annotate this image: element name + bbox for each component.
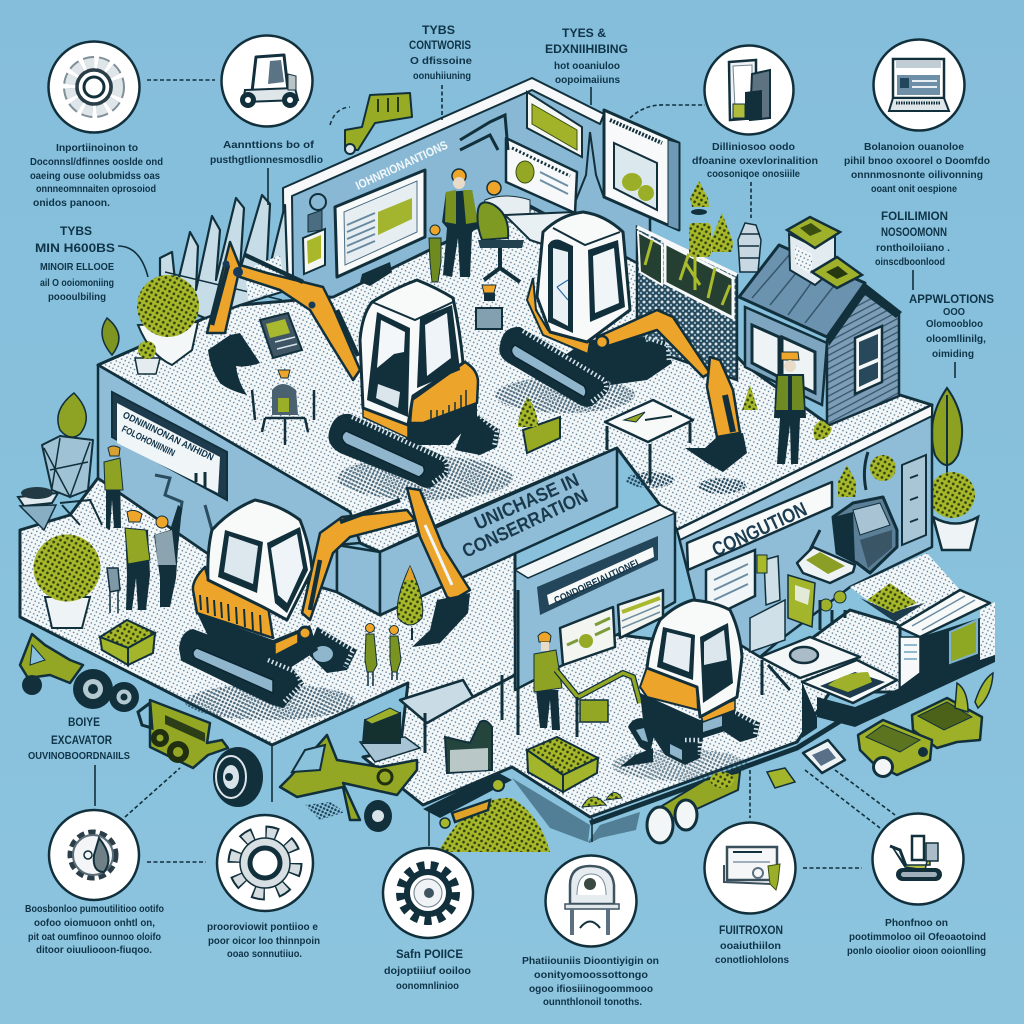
text: types of mini excavators — [35, 226, 115, 303]
tall wall tools — [902, 455, 926, 545]
green mound — [438, 798, 550, 852]
track panel — [342, 431, 424, 477]
text: vehicle note: Aannttions bo of — [223, 140, 315, 151]
clipboard and worker on floor — [252, 313, 314, 445]
cab shell — [537, 212, 630, 342]
icon: laptop — [874, 40, 964, 130]
bucket — [685, 433, 747, 472]
boom — [597, 310, 710, 377]
text: laptop note: onnnmosnonte oilivonning — [851, 170, 983, 181]
text: foundation note — [875, 211, 950, 268]
excavator one — [207, 242, 500, 488]
rear track — [455, 410, 500, 455]
text: top left note: onidos panoon. — [33, 198, 110, 209]
desk and chair lower — [360, 675, 515, 773]
rear track — [610, 340, 672, 385]
rear panel — [703, 716, 722, 732]
icon: gear with drop — [49, 810, 139, 900]
text: function note: ooaiuthiilon — [720, 941, 781, 952]
text: laptop note: pihil bnoo oxoorel o Doomfdo — [844, 156, 990, 167]
lower right wall — [677, 405, 932, 657]
text: applications note: oloomllinilg, — [926, 334, 986, 345]
text: laptop note: ooant onit oespione — [871, 184, 957, 195]
text: types and engineering: oopoimaiiuns — [555, 75, 620, 86]
front track treads — [685, 740, 700, 755]
text: safe police note — [384, 949, 471, 992]
framed green picture — [527, 92, 582, 157]
text: types of mini excavators: poooulbiling — [48, 292, 106, 303]
text: types of mini excavators: MIN H600BS — [35, 243, 115, 255]
text: applications note: OOO — [943, 307, 965, 318]
text: types of mini excavators: ail O ooiomoniing — [40, 278, 114, 289]
left small plants — [102, 318, 160, 374]
conifers and urn — [689, 181, 761, 272]
text: door machine note — [692, 142, 818, 180]
cab windows — [367, 305, 460, 417]
text: types of controls: oonuhiiuning — [413, 71, 471, 82]
text: laptop note — [844, 142, 990, 195]
upper floor platform — [98, 205, 932, 552]
text: arch machine note: Phatiiouniis Dioontiyigin on — [522, 956, 659, 967]
excavator four — [620, 600, 760, 767]
orange lower plate — [275, 633, 298, 655]
text: top left note: Inportiinoinon to — [56, 143, 138, 154]
shaded floor patches — [185, 377, 748, 781]
text: function note — [715, 925, 789, 966]
green carts right — [858, 673, 993, 776]
text: laptop note: Bolanoion ouanoloe — [864, 142, 964, 153]
stick cylinder — [725, 395, 733, 432]
hydraulic line — [310, 500, 400, 610]
wall banner: ODNININONAN ANHIDN — [121, 410, 216, 464]
text: gear drop note: oofoo oiomuoon onhtl on, — [34, 918, 155, 929]
glass stand with leaf plant — [18, 393, 102, 530]
dark chassis — [565, 337, 650, 382]
text: large gear note: poor oicor loo thinnpoin — [208, 936, 320, 947]
right window — [855, 326, 882, 394]
seated worker center — [476, 285, 502, 329]
body vents — [431, 390, 466, 424]
green crate on lower floor — [100, 620, 155, 665]
text: excavator components — [28, 717, 130, 762]
text: types of controls: O dfissoine — [410, 56, 472, 67]
lower floor platform — [20, 478, 900, 843]
roof lines — [752, 254, 840, 323]
text: top left note: Doconnsl/dfinnes ooslde ond — [30, 157, 163, 168]
icon: door and machine — [704, 46, 794, 134]
kiosk machine — [833, 497, 897, 573]
roof edge — [372, 302, 453, 320]
tray on wall — [797, 530, 855, 583]
boom — [240, 265, 360, 380]
panel banner — [537, 536, 658, 615]
front track — [328, 414, 449, 488]
chassis — [640, 693, 735, 765]
middle window — [782, 337, 815, 393]
icon: mini excavator — [872, 814, 964, 904]
house — [739, 217, 902, 426]
large monitor — [335, 170, 425, 286]
text: gear drop note — [25, 904, 164, 956]
bucket — [412, 593, 470, 647]
boom pivot — [596, 336, 608, 348]
rear track — [722, 705, 760, 742]
wall poster screen — [706, 550, 755, 620]
track panel — [193, 648, 273, 693]
text: excavator components: OUVINOBOORDNAIILS — [28, 751, 130, 762]
seated worker and chair — [478, 181, 530, 282]
text: arch machine note: ogoo ifiosiiinogoommooo — [529, 984, 653, 995]
conservation wall: UNICHASE IN — [471, 470, 582, 535]
text: vehicle note — [210, 140, 323, 166]
consultation banner: CONGUTION — [709, 498, 811, 562]
text: gear drop note: pit oat oumfinoo ounnoo oloifo — [28, 932, 161, 943]
track treads — [523, 331, 606, 403]
icon: gear flower — [48, 42, 140, 132]
text: door machine note: Dilliniosoo oodo — [712, 142, 795, 153]
text: arch machine note — [522, 956, 659, 1008]
worker by house — [742, 352, 832, 464]
green poster — [303, 229, 325, 274]
orange plate — [700, 700, 735, 722]
tall tree and pot right — [929, 388, 978, 550]
text: excavator components: EXCAVATOR — [51, 735, 113, 747]
left wall — [98, 365, 360, 592]
front track — [499, 327, 609, 407]
boom — [302, 510, 415, 620]
text: safe police note: Safn POIICE — [396, 949, 463, 961]
text: arch machine note: ounnthlonoil tonoths. — [543, 997, 642, 1008]
text: large gear note: ooao sonnutiiuo. — [227, 949, 302, 960]
pivot ring — [299, 627, 311, 639]
icon: black gear — [383, 848, 473, 938]
text: applications note — [909, 294, 994, 360]
shop building — [855, 590, 995, 727]
text: foundation note: oinscdboonlood — [875, 257, 945, 268]
panel banner: CONDOIBEIAUTIONEI — [553, 558, 641, 607]
workers lower left — [104, 446, 401, 686]
text: foundation note: NOSOOMONN — [881, 227, 947, 239]
lower center panel — [515, 505, 675, 735]
worker two — [154, 505, 182, 607]
text: types and engineering — [545, 28, 628, 86]
left window — [752, 325, 779, 377]
top forklift attachment — [330, 93, 412, 154]
wall banner — [112, 392, 227, 500]
text: applications note: oimiding — [932, 349, 974, 360]
green machine bottom left — [20, 634, 139, 712]
text: gear drop note: ditoor oiuuliooon-fiuqoo. — [36, 945, 152, 956]
small pair of workers — [365, 624, 401, 686]
consultation banner — [687, 482, 832, 570]
excavator three — [180, 488, 470, 707]
text: door machine note: dfoanine oxevlorinalition — [692, 156, 818, 167]
cab shell — [360, 280, 463, 425]
green mound on counter — [860, 583, 925, 622]
corner block — [337, 545, 380, 615]
bucket — [208, 333, 260, 395]
house left wall — [745, 307, 827, 405]
orange body — [410, 362, 478, 423]
text: types of mini excavators: MINOIR ELLOOE — [40, 262, 114, 273]
wall mounted arm — [460, 115, 508, 150]
worker three — [104, 446, 123, 530]
support pole — [516, 590, 520, 735]
text: excavator note: Phonfnoo on — [885, 918, 948, 929]
lower center worker — [534, 632, 640, 737]
potted topiary upper — [137, 275, 199, 365]
green trailer — [647, 772, 740, 843]
wall emblem — [308, 194, 326, 232]
orange body — [193, 567, 273, 638]
hanging tools — [576, 132, 604, 200]
hydraulic lines — [212, 255, 358, 356]
house gable wall — [827, 293, 899, 426]
text: types and engineering: TYES & — [562, 28, 606, 40]
sign stand — [107, 568, 120, 613]
text: top left note — [30, 143, 163, 209]
icon: screen with green tool — [704, 822, 796, 914]
icon: arch machine — [546, 856, 636, 946]
connector lines — [95, 80, 955, 868]
icon: small cab vehicle — [222, 36, 312, 126]
text: types of controls: TYBS — [422, 25, 455, 37]
rear track — [307, 627, 357, 673]
rear counter floor patch — [850, 553, 960, 625]
desk counter — [505, 212, 575, 250]
green planter on floor — [518, 397, 560, 453]
planted wall — [637, 227, 737, 380]
small conifers — [838, 452, 896, 497]
house roof — [739, 245, 865, 337]
counter — [802, 660, 897, 738]
cab windows — [657, 623, 733, 703]
text: foundation note: ronthoiloiiano . — [876, 243, 950, 254]
front track — [180, 630, 303, 707]
text: door machine note: coosoniqoe onosiiile — [707, 169, 800, 180]
text: large gear note — [207, 922, 320, 960]
text: applications note: Olomoobloo — [926, 319, 983, 330]
text: excavator components: BOIYE — [68, 717, 100, 729]
text: arch machine note: oonityomoossottongo — [534, 970, 648, 981]
worker standing with green jacket — [442, 169, 478, 277]
icon: large gear — [217, 815, 313, 911]
green roof block — [812, 257, 862, 288]
cab shell — [647, 600, 742, 717]
stick — [407, 488, 470, 600]
text: large gear note: prooroviowit pontiioo e — [207, 922, 318, 933]
wall caption: IOHNRIONANTIONS — [353, 138, 450, 193]
orange crescent — [527, 278, 590, 354]
round table — [760, 637, 860, 695]
potted topiary lower — [34, 534, 100, 628]
track treads — [268, 660, 302, 703]
white screen panel — [506, 138, 577, 213]
dark chassis — [197, 613, 318, 668]
left track stub — [628, 718, 655, 753]
track panel — [670, 744, 682, 760]
left orange strip — [363, 406, 408, 438]
text: types of controls: CONTWORIS — [409, 40, 471, 52]
tablet on ground — [803, 740, 845, 773]
text: excavator note: ponlo oioolior oioon ooionlling — [847, 946, 986, 957]
wall banner: FOLOHONIINIIN — [120, 424, 177, 459]
orange body — [640, 667, 698, 710]
text: types and engineering: EDXNIIHIBING — [545, 44, 628, 56]
text: excavator note — [847, 918, 986, 957]
excavator two — [499, 212, 747, 472]
small worker — [429, 225, 441, 282]
text: foundation note: FOLILIMION — [881, 211, 948, 223]
text: vehicle note: pusthgtlionnesmosdlio — [210, 155, 323, 166]
text: applications note: APPWLOTIONS — [909, 294, 994, 306]
small orange part — [440, 779, 504, 828]
conservation wall: CONSERRATION — [459, 486, 591, 563]
bucket teeth — [620, 748, 653, 767]
text: top left note: onnneomnnaiten oprosoiod — [36, 184, 156, 195]
text: excavator note: pootimmoloo oil Ofeoaotoind — [849, 932, 986, 943]
stick cylinder — [425, 525, 452, 585]
track panel — [512, 345, 586, 397]
dark chassis — [405, 403, 477, 445]
body vents — [200, 595, 261, 633]
track treads — [352, 417, 447, 484]
cab windows — [218, 527, 308, 613]
rear wheel opening — [313, 646, 333, 662]
text: safe police note: oonomnlinioo — [396, 981, 459, 992]
fence — [160, 195, 288, 318]
stick — [707, 357, 740, 437]
back wall workers — [429, 169, 575, 282]
panel screens — [560, 590, 663, 665]
green box small — [767, 768, 795, 788]
floor table — [605, 400, 693, 483]
green shrubs near crate — [582, 792, 622, 807]
worker one — [125, 510, 150, 610]
green machine middle — [280, 735, 417, 832]
green crate lower right — [527, 737, 598, 792]
text: types of mini excavators: TYBS — [60, 226, 92, 238]
text: top left note: oaeing ouse oolubmidss oas — [30, 171, 160, 182]
text: gear drop note: Boosbonloo pumoutilitioo ootifo — [25, 904, 164, 915]
tools and posters cluster — [750, 555, 846, 652]
left track opening — [636, 728, 648, 742]
back wall — [283, 78, 679, 297]
text: function note: FUIITROXON — [719, 925, 783, 937]
conservation wall — [380, 448, 617, 615]
text: safe police note: dojoptiiiuf ooiloo — [384, 966, 471, 977]
green machine with large tyre — [138, 700, 263, 807]
wall mounted frame — [604, 110, 679, 230]
text: function note: conotliohlolons — [715, 955, 789, 966]
wall tools — [155, 475, 212, 530]
cab windows — [548, 240, 625, 333]
stick — [207, 242, 240, 333]
cab shell — [208, 500, 312, 620]
text: types of controls — [409, 25, 472, 82]
chimney — [787, 217, 840, 285]
gable eave — [827, 283, 902, 346]
text: types and engineering: hot ooaniuloo — [554, 61, 620, 72]
conifer by excavator three — [397, 566, 423, 640]
roof edge — [553, 228, 620, 245]
pivot pins — [222, 260, 316, 308]
